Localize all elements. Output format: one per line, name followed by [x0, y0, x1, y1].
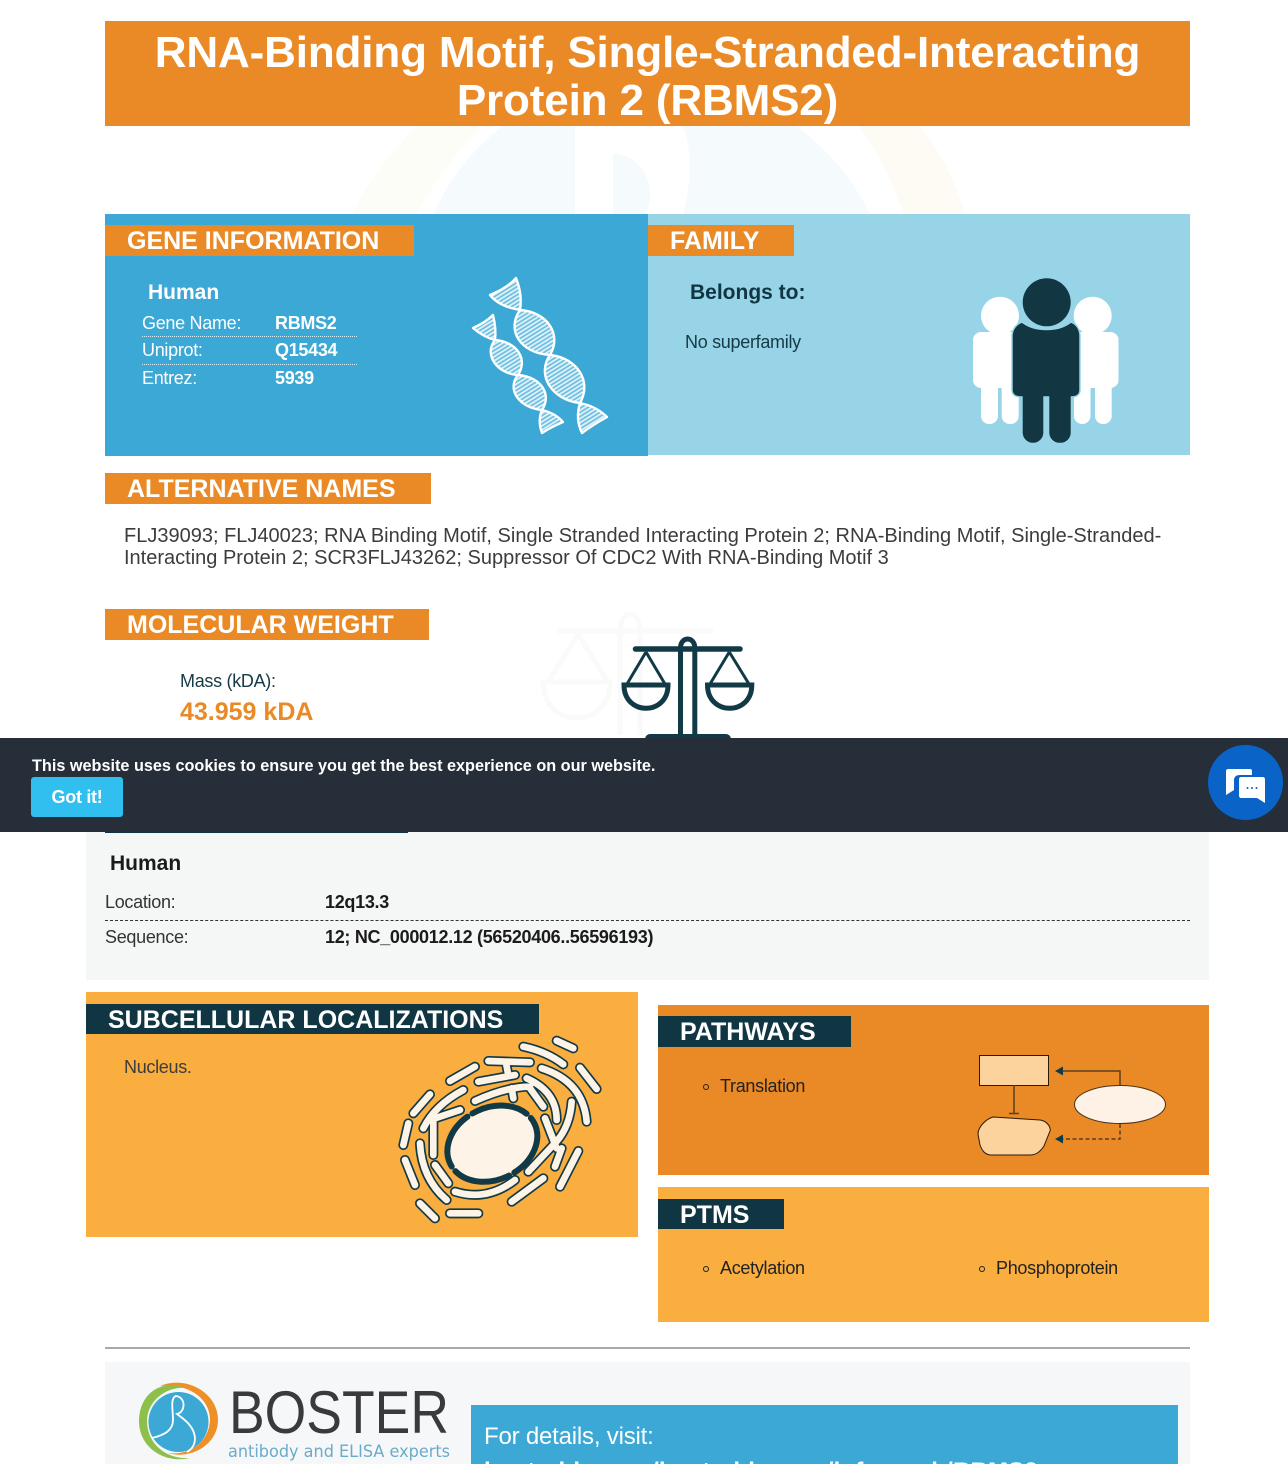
bullet [703, 1266, 709, 1272]
heading: PTMs [658, 1199, 784, 1229]
entrez row [142, 368, 314, 388]
heading: molecular weight: MOLECULAR WEIGHT [127, 611, 394, 639]
button: got it [31, 777, 123, 817]
cookie message: This website uses cookies to ensure you get the best experience on our website. [32, 757, 655, 775]
uniprot row: Q15434 [275, 340, 337, 360]
sequence row: 12; NC_000012.12 (56520406..56596193) [325, 927, 653, 947]
icon: chat button [1208, 745, 1283, 820]
alternative names text: FLJ39093; FLJ40023; RNA Binding Motif, Single Stranded Interacting Protein 2; RNA-Binding Motif, Single-Stranded- [124, 525, 1161, 547]
alternative names text: Interacting Protein 2; SCR3FLJ43262; Suppressor Of CDC2 With RNA-Binding Motif 3 [124, 547, 889, 569]
icon: balance scale [622, 636, 754, 738]
alternative names text [124, 525, 1161, 569]
icon: pathway diagram [978, 1055, 1166, 1156]
cookie banner [0, 738, 1288, 832]
bullet [703, 1084, 709, 1090]
heading: pathways [658, 1016, 851, 1047]
location row: 12q13.3 [325, 892, 389, 912]
sequence row [105, 927, 653, 947]
entrez row: 5939 [275, 368, 314, 388]
location row [105, 890, 1190, 921]
panel: chromosome location [86, 832, 1209, 980]
belongs to label: Belongs to: [690, 281, 806, 304]
callout: details link [471, 1405, 1178, 1464]
location row: Location: [105, 892, 175, 912]
title banner [105, 21, 1190, 126]
icon: DNA helices [472, 276, 608, 434]
pathway item: Translation [720, 1076, 805, 1096]
logo: Boster [139, 1379, 450, 1462]
panel: pathways [658, 1005, 1209, 1175]
PTM item: phosphoprotein: Phosphoprotein [996, 1258, 1118, 1278]
title banner: Protein 2 (RBMS2) [457, 76, 838, 125]
gene name row [142, 312, 357, 337]
icon: people group [973, 278, 1118, 443]
panel: family [648, 214, 1190, 455]
panel: gene information [105, 214, 648, 456]
species label: Human [148, 281, 219, 304]
localization text: Nucleus. [124, 1057, 192, 1077]
heading: family: FAMILY [670, 227, 759, 255]
title banner: RNA-Binding Motif, Single-Stranded-Interacting [155, 28, 1140, 77]
details label: For details, visit: [484, 1423, 654, 1450]
heading: gene information: GENE INFORMATION [127, 227, 379, 255]
mass label: Mass (kDA): [180, 671, 276, 691]
superfamily value: No superfamily [685, 332, 801, 352]
species label: Human [110, 852, 181, 875]
uniprot row: Uniprot: [142, 340, 203, 360]
gene name row: Gene Name: [142, 313, 241, 333]
sequence row: Sequence: [105, 927, 188, 947]
tagline: antibody and ELISA experts [228, 1442, 450, 1462]
panel: subcellular localizations [86, 992, 638, 1237]
mass value: 43.959 kDA [180, 698, 313, 726]
PTM item: acetylation: Acetylation [720, 1258, 805, 1278]
heading: PTMs: PTMS [680, 1201, 749, 1229]
button: got it: Got it! [52, 787, 102, 807]
heading: alternative names: ALTERNATIVE NAMES [127, 475, 396, 503]
bullet [979, 1266, 985, 1272]
icon: nucleus with endoplasmic reticulum [398, 1036, 602, 1224]
panel: PTMs [658, 1187, 1209, 1322]
uniprot row [142, 339, 357, 365]
gene name row: RBMS2 [275, 313, 337, 333]
heading: subcellular localizations: SUBCELLULAR LOCALIZATIONS [108, 1006, 503, 1034]
heading: family [648, 225, 794, 256]
icon: faint scale watermark [535, 610, 725, 735]
panel: footer [105, 1362, 1190, 1464]
heading: pathways: PATHWAYS [680, 1018, 816, 1046]
entrez row: Entrez: [142, 368, 197, 388]
